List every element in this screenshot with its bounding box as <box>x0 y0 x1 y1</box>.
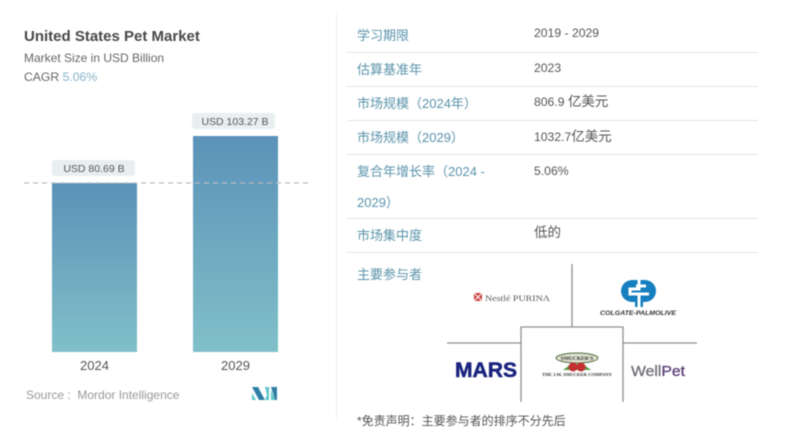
logo: Smucker's: THE J.M. SMUCKER COMPANY <box>542 372 613 377</box>
row: CAGR: 5.06% <box>534 164 569 178</box>
panel: market facts table <box>347 26 758 428</box>
panel: chart <box>24 28 308 402</box>
row: study period <box>357 26 600 43</box>
label: USD 80.69 B <box>52 160 135 176</box>
row: study period: 学习期限 <box>357 28 409 43</box>
subtitle: Market Size in USD Billion <box>24 51 164 65</box>
row: concentration <box>357 224 561 243</box>
row: study period: 2019 - 2029 <box>534 26 599 40</box>
axis label: 2024: 2024 <box>80 358 109 373</box>
source: Source : Mordor Intelligence <box>26 388 179 402</box>
CAGR: CAGR 5.06% <box>24 70 97 84</box>
row: market size 2029 <box>357 128 612 145</box>
icon: Mordor logo <box>251 386 278 401</box>
disclaimer: *免责声明：主要参与者的排序不分先后 <box>357 414 566 428</box>
logo: WellPet: WellPet <box>631 363 686 380</box>
row: concentration: 市场集中度 <box>357 228 422 243</box>
label: USD 80.69 B: USD 80.69 B <box>63 163 125 175</box>
label: USD 103.27 B: USD 103.27 B <box>201 116 269 128</box>
logo: Colgate-Palmolive: COLGATE-PALMOLIVE <box>600 310 677 317</box>
row: concentration: 低的 <box>534 225 561 240</box>
row: market size 2024: 市场规模（2024年） <box>357 96 477 111</box>
logo: Smucker's: SMUCKER'S <box>561 356 593 362</box>
row: base year: 估算基准年 <box>357 62 422 77</box>
logo: Mars: MARS <box>455 358 517 382</box>
row: market size 2024 <box>357 94 608 111</box>
row: market size 2024: 806.9 亿美元 <box>534 94 608 109</box>
logo: Smucker's <box>542 353 613 377</box>
row: base year <box>356 61 562 77</box>
bar: 2029 <box>193 136 278 352</box>
row: CAGR <box>357 164 569 210</box>
row: market size 2029: 1032.7亿美元 <box>534 129 612 144</box>
row: market size 2029: 市场规模（2029） <box>357 130 464 145</box>
row: base year: 2023 <box>534 61 561 75</box>
row: CAGR: 2029） <box>357 195 399 210</box>
heading: major players: 主要参与者 <box>357 267 422 282</box>
label: USD 103.27 B <box>192 113 275 129</box>
bar: 2024 <box>52 183 137 352</box>
panel divider <box>336 12 337 420</box>
player logos <box>446 264 698 402</box>
title: United States Pet Market <box>24 28 200 45</box>
axis label: 2029: 2029 <box>221 358 250 373</box>
logo: Colgate-Palmolive <box>600 280 677 317</box>
logo: Nestle Purina: Nestlé PURINA <box>485 293 551 303</box>
row: CAGR: 复合年增长率（2024 - <box>357 164 485 179</box>
bar chart <box>24 113 308 373</box>
